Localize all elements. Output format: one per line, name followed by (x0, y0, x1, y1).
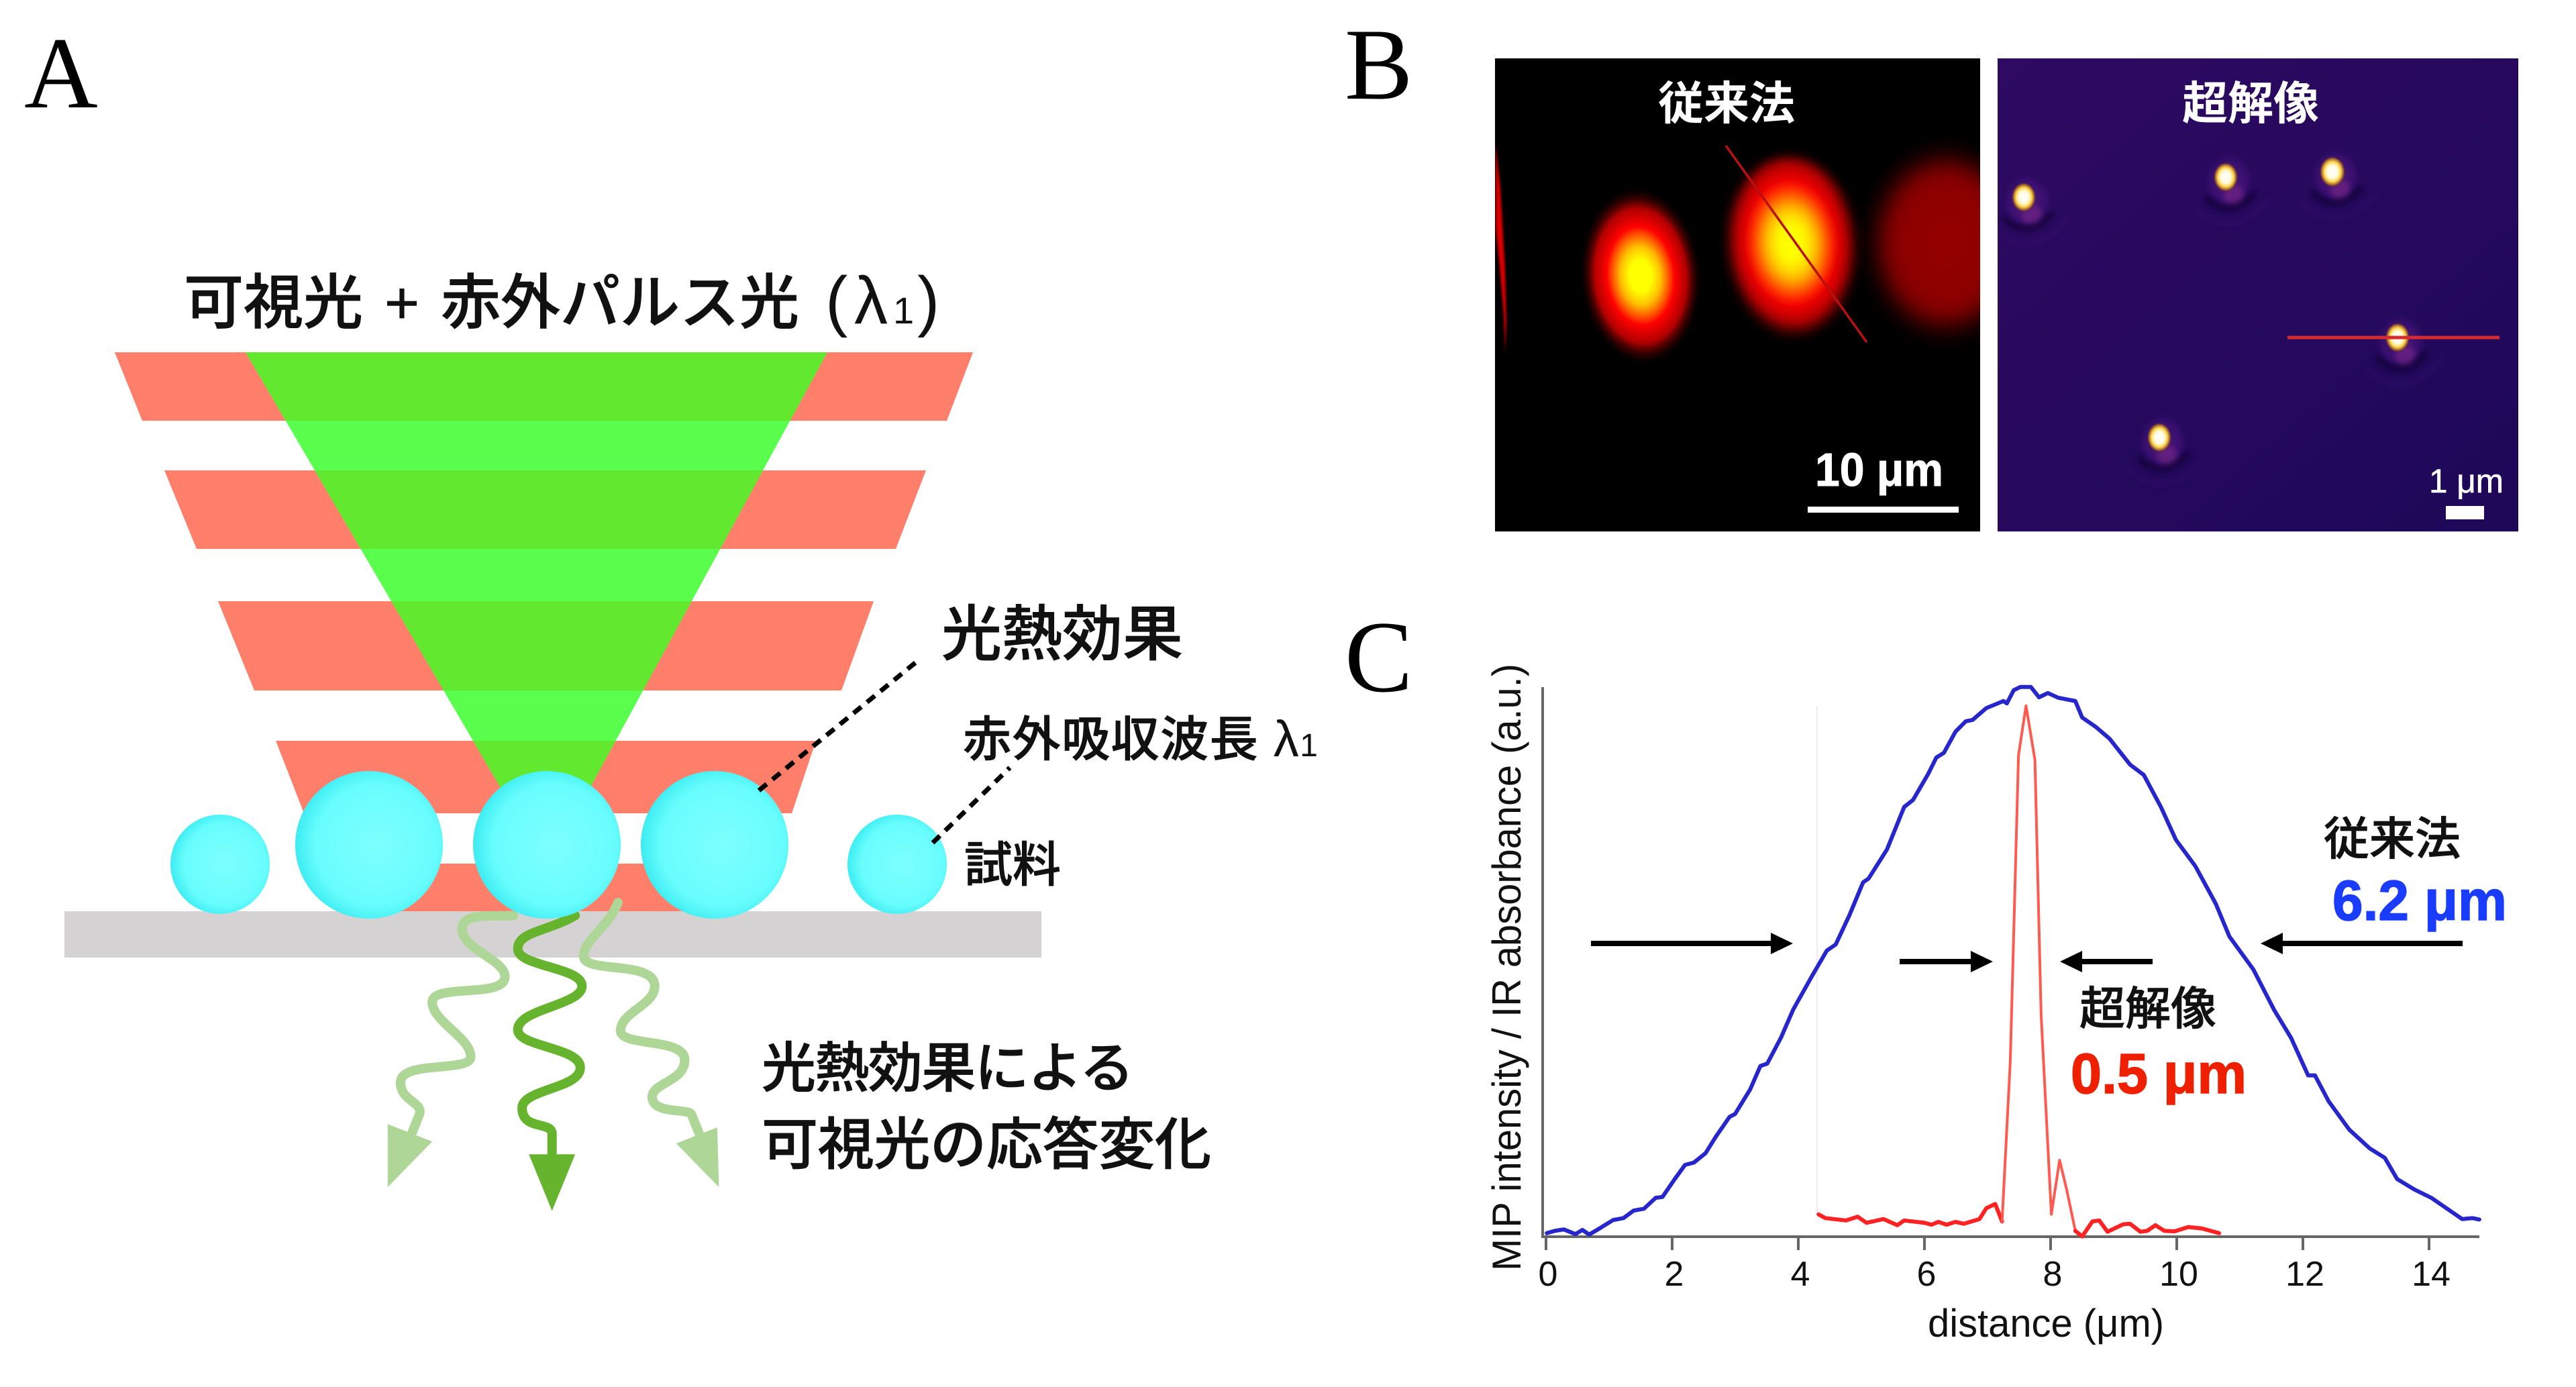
purple image background (1998, 58, 2518, 531)
substrate (64, 911, 1041, 958)
x-axis title: distance (μm) (1928, 1302, 2164, 1345)
panel A: photothermal schematic (64, 263, 1318, 1211)
label: photothermal effect: 光熱効果 (941, 601, 1183, 668)
curve: conventional profile (blue) (1547, 687, 2479, 1235)
label: super-resolution: 超解像 (2079, 984, 2216, 1035)
wavy arrow: right scattered light (584, 903, 719, 1187)
panel label: C: C (1345, 601, 1412, 713)
heading: visible and IR pulse light: 1 (893, 289, 914, 331)
label: visible response change: 光熱効果による (762, 1039, 1134, 1099)
x-axis tick labels: 2 (1665, 1255, 1684, 1294)
heading: visible and IR pulse light: λ (854, 263, 888, 338)
sample spheres (170, 771, 947, 919)
curve: super-resolution profile (red) (1818, 706, 2219, 1237)
x-axis tick labels: 14 (2412, 1255, 2451, 1294)
panel label: B: B (1345, 8, 1412, 121)
x-axis tick labels: 4 (1791, 1255, 1810, 1294)
black image background (1495, 58, 1980, 531)
label: IR absorption wavelength: 赤外吸収波長 λ1 (963, 711, 1318, 768)
label: conventional: 従来法 (2324, 814, 2461, 865)
label: sample: 試料 (964, 839, 1061, 892)
image title: conventional: 従来法 (1658, 79, 1795, 130)
value: 0.5 um: 0.5 μm (2071, 1042, 2247, 1105)
wavy arrow: left scattered light (388, 915, 513, 1187)
x-axis tick labels: 10 (2159, 1255, 2198, 1294)
arrow: conventional width left (1591, 933, 1793, 954)
arrow: super-resolution width right (2060, 951, 2153, 972)
label: visible response change: 可視光の応答変化 (762, 1113, 1211, 1176)
arrow: conventional width right (2261, 933, 2463, 954)
x-axis tick labels: 6 (1917, 1255, 1936, 1294)
x-axis tick labels: 8 (2043, 1255, 2062, 1294)
chart axes (1543, 687, 2479, 1250)
bright particle spots (1992, 148, 2443, 484)
heading: visible and IR pulse light: + (384, 269, 419, 336)
line profile marker (1726, 146, 1867, 342)
arrow: super-resolution width left (1900, 951, 1993, 972)
infrared beam bands (115, 352, 973, 911)
heading: visible and IR pulse light: ( (825, 263, 847, 338)
faint guide line (1816, 706, 1818, 1215)
value: 6.2 um: 6.2 μm (2332, 869, 2507, 932)
panel B left: conventional image (1495, 58, 2028, 531)
panel B right: super-resolution image (1992, 58, 2518, 531)
scale bar (1808, 507, 1959, 513)
dashed leader: sample (933, 768, 1010, 843)
y-axis title: MIP intensity / IR absorbance (a.u.) (1484, 664, 1529, 1271)
scale label: 1 um: 1 μm (2429, 462, 2504, 500)
visible light green cone (246, 352, 827, 788)
panel C: line profile chart (1484, 664, 2507, 1345)
x-axis tick labels (1539, 1255, 2451, 1294)
x-axis tick labels: 12 (2285, 1255, 2324, 1294)
heading: visible and IR pulse light: 可視光 (184, 269, 363, 336)
image title: super-resolution: 超解像 (2182, 79, 2319, 130)
wavy arrow: center response light (518, 915, 582, 1211)
line profile marker (2287, 336, 2500, 340)
scale label: 10 um: 10 μm (1815, 444, 1943, 496)
heat-map blobs (1496, 142, 2028, 369)
scale bar (2446, 506, 2484, 519)
panel label: A: A (24, 17, 98, 130)
label: visible response change (762, 1039, 1211, 1176)
x-axis tick labels: 0 (1539, 1255, 1557, 1294)
heading: visible and IR pulse light: 赤外パルス光 (441, 269, 799, 336)
dashed leader: photothermal effect (759, 659, 920, 790)
heading: visible and IR pulse light: ) (917, 263, 939, 338)
